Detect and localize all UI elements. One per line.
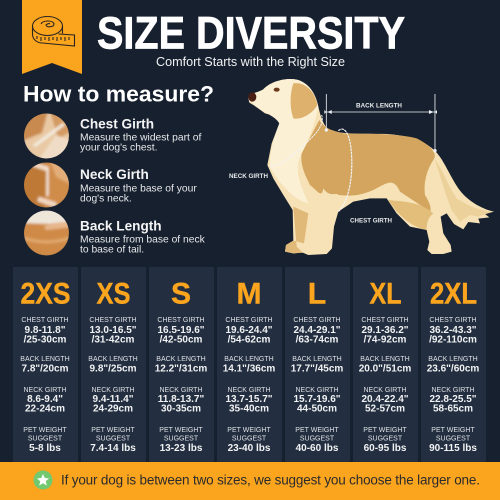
size column: L: CHEST GIRTH	[293, 317, 341, 324]
description: back length: to base of tail.	[80, 245, 144, 256]
size column: L: 40-60 lbs	[296, 443, 339, 454]
size column: S: PET WEIGHT	[159, 427, 203, 434]
size column: XL: /74-92cm	[364, 335, 407, 346]
size column: 2XS: 22-24cm	[25, 404, 65, 414]
size column: XS: 24-29cm	[93, 404, 133, 414]
description: back length: Measure from base of neck	[80, 235, 206, 246]
label: chest girth: CHEST GIRTH	[350, 218, 392, 224]
photo: back length	[24, 210, 69, 256]
callout text: If your dog is between two sizes, we suggest you choose the larger one.	[61, 472, 480, 488]
label: back length: BACK LENGTH	[356, 104, 402, 110]
size column: M: M	[236, 278, 262, 311]
size column: XL: XL	[370, 278, 402, 311]
dog saddle	[301, 120, 435, 212]
icon: tape measure	[32, 16, 74, 46]
size column: 2XL: 58-65cm	[433, 404, 473, 414]
size column: M: /54-62cm	[228, 335, 271, 346]
size column: M: SUGGEST	[232, 436, 267, 443]
size column: XL: SUGGEST	[368, 436, 403, 443]
size column: 2XL: 90-115 lbs	[429, 443, 477, 454]
photo: neck girth	[24, 162, 69, 208]
description: chest girth: Measure the widest part of	[80, 132, 201, 144]
size column: 2XL: 36.2-43.3"	[430, 325, 477, 336]
dog illustration with measurement lines	[248, 79, 494, 255]
size column: S: SUGGEST	[164, 436, 199, 443]
size column: XL: 20.0"/51cm	[359, 364, 411, 374]
size column: 2XS: /25-30cm	[24, 335, 67, 346]
panel: chest girth instruction	[24, 114, 202, 158]
size column: M: 13.7-15.7"	[226, 394, 273, 405]
photo: chest girth	[24, 114, 69, 158]
size column: XL: 60-95 lbs	[364, 443, 407, 454]
size column: M: CHEST GIRTH	[225, 317, 273, 324]
size column: 2XL: BACK LENGTH	[428, 356, 478, 363]
size column: L: L	[308, 278, 326, 311]
size column: 2XS: SUGGEST	[28, 436, 63, 443]
size column: L: 17.7"/45cm	[291, 364, 343, 374]
panel: back length instruction	[22, 209, 206, 257]
back length arrow	[324, 94, 437, 152]
size column: XS: 9.8"/25cm	[90, 364, 137, 374]
size column: L: BACK LENGTH	[292, 356, 342, 363]
size column: 2XS: CHEST GIRTH	[21, 317, 69, 324]
dog hind leg shade	[388, 200, 433, 230]
size column: L: /63-74cm	[296, 335, 339, 346]
size column: XS	[81, 267, 146, 462]
size column: XL: CHEST GIRTH	[361, 317, 409, 324]
dog ear	[291, 83, 317, 119]
description: neck girth: dog's neck.	[80, 194, 132, 205]
size column: XL: 29.1-36.2"	[362, 325, 409, 336]
size column: XL: 52-57cm	[365, 404, 405, 414]
size column: XS: 9.4-11.4"	[93, 394, 134, 405]
chest girth loop	[338, 129, 352, 212]
size column: XS: 7.4-14 lbs	[90, 443, 136, 454]
size column: 2XL: SUGGEST	[436, 436, 471, 443]
size column: 2XL	[421, 267, 486, 462]
size column: XS: BACK LENGTH	[88, 356, 138, 363]
size column: L: SUGGEST	[300, 436, 335, 443]
size column: L: 44-50cm	[297, 404, 337, 414]
size column: M: NECK GIRTH	[227, 387, 271, 394]
icon: green star badge	[34, 470, 52, 490]
size column: M: BACK LENGTH	[224, 356, 274, 363]
size column: 2XS: BACK LENGTH	[20, 356, 70, 363]
size column: L: 15.7-19.6"	[294, 394, 341, 405]
size column: S: 16.5-19.6"	[158, 325, 205, 336]
size column: L	[285, 267, 350, 462]
dog front leg shade	[285, 207, 308, 253]
size column: S: CHEST GIRTH	[157, 317, 205, 324]
size column: L: PET WEIGHT	[295, 427, 339, 434]
size column: L: 24.4-29.1"	[294, 325, 341, 336]
size column: S: 12.2"/31cm	[155, 364, 207, 374]
heading: chest girth: Chest Girth	[80, 117, 154, 132]
size column: XL: 20.4-22.4"	[362, 394, 409, 405]
size column: XL: BACK LENGTH	[360, 356, 410, 363]
dog nose and eye	[248, 92, 256, 102]
size column: S: /42-50cm	[160, 335, 203, 346]
size column: 2XS	[13, 267, 78, 462]
size column: S: NECK GIRTH	[159, 387, 203, 394]
size column: 2XL: PET WEIGHT	[431, 427, 475, 434]
size column: L: NECK GIRTH	[295, 387, 339, 394]
size column: 2XL: /92-110cm	[429, 335, 477, 346]
panel: neck girth instruction	[22, 161, 197, 209]
size column: 2XL: NECK GIRTH	[431, 387, 475, 394]
heading: neck girth: Neck Girth	[80, 167, 149, 182]
size column: M: 23-40 lbs	[228, 443, 271, 454]
size column: M	[217, 267, 282, 462]
size column: S: S	[171, 278, 191, 311]
subtitle: Comfort Starts with the Right Size	[156, 55, 345, 69]
size column: 2XS: 2XS	[20, 278, 70, 311]
dog tail feathers	[435, 160, 492, 222]
size column: S: 11.8-13.7"	[158, 394, 204, 405]
callout banner	[0, 462, 500, 500]
dog body	[248, 79, 494, 255]
size column: XS: PET WEIGHT	[91, 427, 135, 434]
ribbon badge with tape measure icon	[22, 0, 82, 74]
dog head light	[248, 79, 318, 203]
size column: S: 30-35cm	[161, 404, 201, 414]
size column: M: PET WEIGHT	[227, 427, 271, 434]
size column: XL: NECK GIRTH	[363, 387, 407, 394]
size column: XS: 13.0-16.5"	[90, 325, 137, 336]
size column: 2XS: PET WEIGHT	[23, 427, 67, 434]
size column: M: 35-40cm	[229, 404, 269, 414]
size column: 2XS: 7.8"/20cm	[22, 364, 69, 374]
size column: M: 19.6-24.4"	[226, 325, 273, 336]
size column: XS: NECK GIRTH	[91, 387, 135, 394]
size column: S: BACK LENGTH	[156, 356, 206, 363]
size column: XS: XS	[96, 278, 130, 311]
size column: XL	[353, 267, 418, 462]
size column: XS: CHEST GIRTH	[89, 317, 137, 324]
size column: 2XL: CHEST GIRTH	[429, 317, 477, 324]
size column: S: 13-23 lbs	[160, 443, 203, 454]
size column: 2XS: 9.8-11.8"	[25, 325, 66, 336]
size column: 2XS: 5-8 lbs	[29, 443, 61, 454]
label: neck girth: NECK GIRTH	[229, 174, 268, 180]
title: SIZE DIVERSITY	[97, 8, 405, 58]
neck girth loop	[269, 115, 322, 166]
size column: M: 14.1"/36cm	[223, 364, 275, 374]
size column: XS: /31-42cm	[92, 335, 135, 346]
size column: 2XL: 22.8-25.5"	[430, 394, 477, 405]
description: chest girth: your dog's chest.	[80, 142, 158, 154]
size column: 2XS: NECK GIRTH	[23, 387, 67, 394]
description: neck girth: Measure the base of your	[80, 184, 197, 195]
heading: back length: Back Length	[80, 219, 162, 234]
size column: 2XS: 8.6-9.4"	[27, 394, 63, 405]
size column: XL: PET WEIGHT	[363, 427, 407, 434]
size column: S	[149, 267, 214, 462]
heading: how to measure: How to measure?	[23, 82, 214, 106]
size column: 2XL: 23.6"/60cm	[427, 364, 479, 374]
size column: 2XL: 2XL	[430, 278, 477, 311]
size column: XS: SUGGEST	[96, 436, 131, 443]
